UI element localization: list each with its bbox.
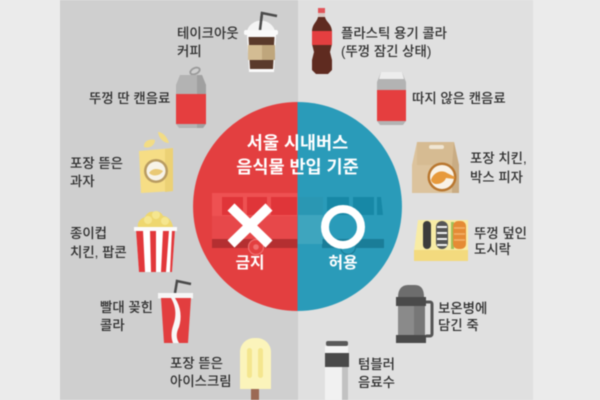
label: covered lunch box (474, 226, 527, 257)
label: opened snack (70, 156, 123, 189)
label: covered lunch box: 도시락 (474, 242, 511, 257)
label: thermos porridge (438, 301, 487, 333)
label: boxed chicken and pizza: 박스 피자 (470, 170, 523, 185)
label: boxed chicken and pizza (470, 151, 527, 185)
title (236, 133, 359, 177)
label: paper cup chicken and popcorn: 종이컵 (70, 226, 107, 241)
label: tumbler drink (358, 357, 395, 390)
label: tumbler drink: 음료수 (358, 375, 395, 390)
label: plastic bottle cola (341, 26, 447, 59)
icon: plastic cola bottle (312, 8, 332, 74)
label: takeout coffee: 테이크아웃 (177, 26, 239, 41)
icon: unopened can (377, 72, 406, 125)
label: tumbler drink: 텀블러 (358, 357, 395, 372)
icon: O mark (325, 209, 361, 245)
label: opened ice cream: 아이스크림 (170, 374, 232, 389)
icon: popcorn (134, 211, 177, 272)
label: cola with straw: 콜라 (100, 318, 125, 333)
icon: takeout coffee (244, 13, 278, 72)
label: opened snack: 포장 뜯은 (70, 156, 123, 171)
label: unopened can: 따지 않은 캔음료 (412, 91, 506, 106)
label: opened can: 뚜껑 딴 캔음료 (89, 91, 170, 106)
label: plastic bottle cola: 플라스틱 용기 콜라 (341, 26, 447, 41)
label: plastic bottle cola: (뚜껑 잠긴 상태) (341, 44, 431, 59)
label: thermos porridge: 보온병에 (438, 301, 487, 316)
label: opened snack: 과자 (70, 174, 95, 189)
circle: prohibited half (193, 102, 298, 311)
central circle with bus (193, 102, 402, 311)
label: boxed chicken and pizza: 포장 치킨, (470, 151, 527, 166)
icon: lunch box (414, 220, 468, 261)
label: opened ice cream (170, 356, 232, 389)
panel: allowed side background (298, 0, 533, 400)
title: 음식물 반입 기준 (236, 157, 359, 177)
label: thermos porridge: 담긴 죽 (438, 318, 479, 333)
icon: opened can (176, 66, 206, 128)
label: paper cup chicken and popcorn (70, 226, 127, 260)
icon: ice cream (240, 338, 271, 400)
label: paper cup chicken and popcorn: 치킨, 팝콘 (70, 245, 127, 260)
label: takeout coffee (177, 26, 239, 59)
circle: allowed half (298, 102, 402, 311)
label: cola with straw: 빨대 꽂힌 (100, 300, 153, 315)
label: cola with straw (100, 300, 153, 333)
title: 서울 시내버스 (247, 133, 348, 153)
label: opened ice cream: 포장 뜯은 (170, 356, 223, 371)
bus illustration (212, 193, 384, 254)
icon: chicken and pizza box (412, 142, 459, 193)
label: covered lunch box: 뚜껑 덮인 (474, 226, 527, 241)
icon: tumbler (325, 341, 349, 400)
panel: prohibited side background (60, 0, 298, 400)
icon: thermos (396, 285, 432, 343)
label: takeout coffee: 커피 (177, 44, 202, 59)
icon: X mark (231, 207, 269, 244)
icon: cola cup with straw (158, 281, 193, 343)
label: allowed: 허용 (328, 254, 358, 272)
icon: opened snack bag (139, 132, 173, 193)
label: prohibited: 금지 (235, 254, 265, 272)
